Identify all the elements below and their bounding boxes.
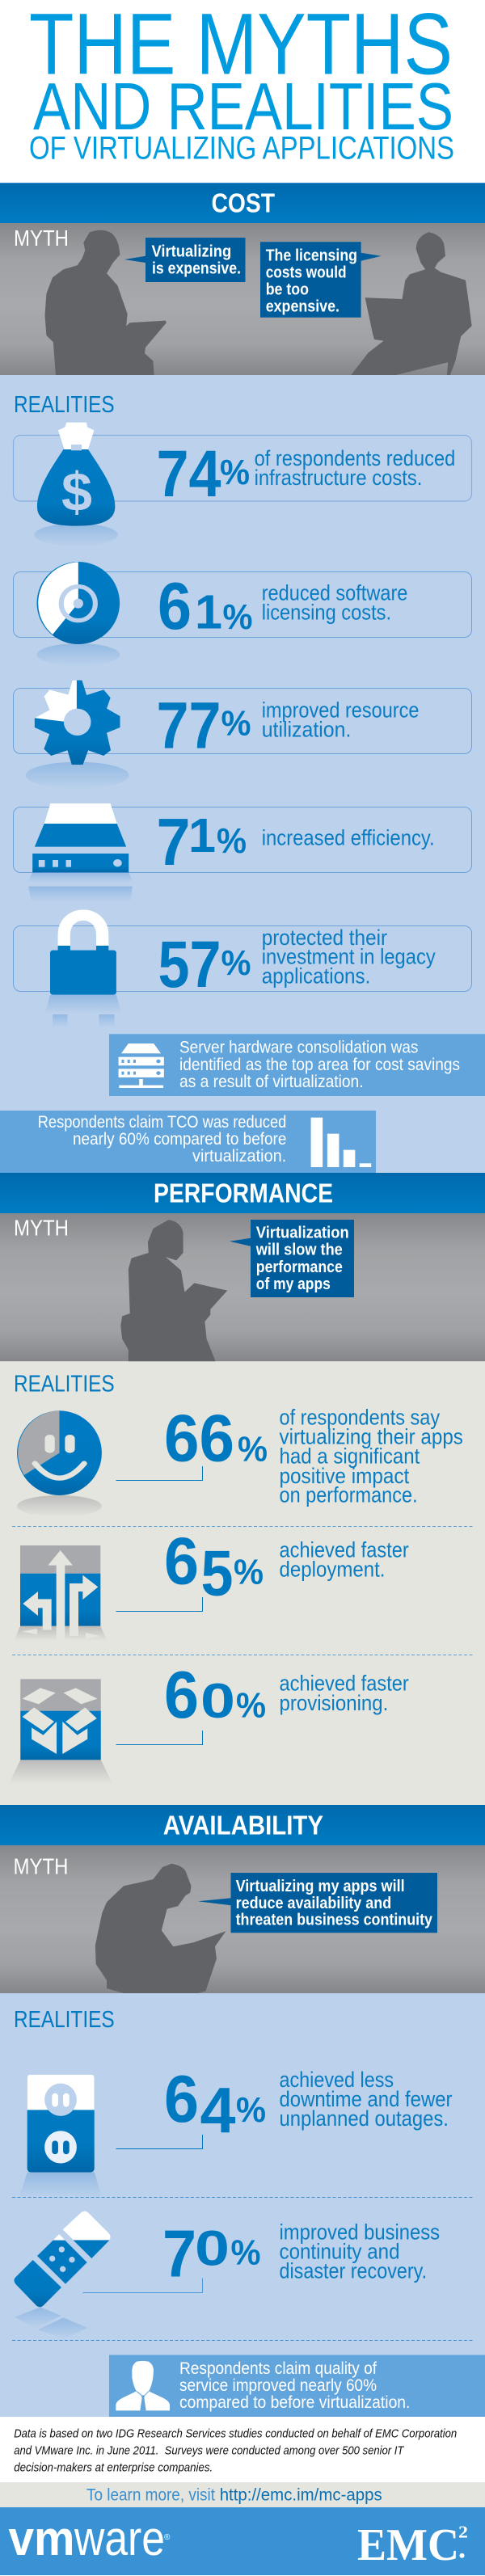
description: provisioning. — [280, 1691, 388, 1715]
heading band: performance: PERFORMANCE — [154, 1178, 333, 1208]
icon: money bag — [34, 423, 118, 546]
heading band: cost — [0, 183, 485, 223]
callout text — [179, 2359, 410, 2412]
value: 0 — [200, 1674, 235, 1728]
speech bubble: virtualizing is expensive: is expensive. — [152, 259, 241, 277]
description: protected their — [262, 925, 387, 950]
value: 5 — [200, 1537, 233, 1608]
callout text: compared to before virtualization. — [179, 2393, 410, 2412]
speech bubble: slow performance: will slow the — [255, 1241, 343, 1259]
speech bubble: licensing costs: be too — [266, 280, 309, 299]
speech bubble: slow performance: Virtualization — [256, 1224, 349, 1242]
value — [158, 568, 252, 643]
speech bubble: licensing costs — [260, 242, 382, 318]
callout: TCO reduced — [0, 1111, 376, 1173]
value: % — [217, 821, 247, 861]
speech bubble: slow performance — [230, 1220, 354, 1297]
source note — [14, 2427, 457, 2475]
description — [262, 925, 436, 989]
connector — [116, 2135, 202, 2148]
callout text: as a result of virtualization. — [179, 1073, 364, 1091]
icon: gear — [26, 681, 129, 789]
speech bubble: reduce availability: Virtualizing my apps will — [236, 1877, 405, 1895]
description: on performance. — [280, 1483, 418, 1507]
speech bubble: reduce availability: threaten business continuity — [236, 1911, 433, 1929]
heading band: cost: COST — [212, 188, 275, 218]
description: continuity and — [280, 2239, 399, 2263]
description: achieved faster — [280, 1672, 409, 1696]
value — [164, 1523, 264, 1608]
icon: server — [27, 803, 133, 901]
speech bubble: virtualizing is expensive: Virtualizing — [152, 242, 231, 260]
speech bubble: licensing costs: costs would — [266, 264, 347, 282]
description: licensing costs. — [262, 601, 391, 625]
description — [262, 581, 407, 625]
stat row: 77% — [13, 681, 472, 789]
source note: and VMware Inc. in June 2011. Surveys were conducted among over 500 senior IT — [14, 2444, 405, 2458]
connector — [82, 2278, 202, 2292]
value: 7 — [157, 804, 191, 879]
footer logos band — [0, 2507, 485, 2575]
speech bubble: reduce availability: reduce availability and — [236, 1894, 391, 1912]
stat row: 64% — [19, 2061, 453, 2198]
value — [164, 1657, 266, 1732]
value: % — [236, 1685, 266, 1725]
description: had a significant — [280, 1444, 420, 1469]
panel: availability myth — [0, 1845, 485, 1993]
value: % — [234, 1552, 264, 1592]
vmware logo: ware — [74, 2511, 165, 2565]
description: applications. — [262, 964, 370, 989]
learn more strip — [0, 2482, 485, 2507]
description: achieved faster — [280, 1538, 409, 1562]
description: of respondents say — [280, 1405, 441, 1429]
description — [280, 1538, 409, 1582]
callout text: identified as the top area for cost savings — [179, 1056, 460, 1074]
speech bubble: virtualizing is expensive — [124, 238, 246, 282]
description: utilization. — [262, 717, 351, 741]
value: 4 — [200, 2074, 236, 2146]
speech bubble: licensing costs: The licensing — [266, 247, 357, 265]
speech bubble: slow performance: performance — [256, 1258, 343, 1276]
myth label: MYTH — [14, 226, 69, 251]
value: 6 — [164, 2061, 199, 2136]
learn more strip: To learn more, visit — [86, 2485, 215, 2504]
panel: cost myth — [0, 223, 485, 375]
value: 6 — [164, 1657, 199, 1732]
EMC2 logo: EMC — [357, 2520, 459, 2570]
learn more strip: http://emc.im/mc-apps — [220, 2485, 382, 2504]
silhouette: hunched man with laptop — [95, 1864, 226, 1993]
value: 7 — [162, 2216, 196, 2291]
callout text: nearly 60% compared to before — [73, 1130, 286, 1149]
stat row: 65% — [14, 1523, 409, 1641]
description — [262, 698, 419, 741]
icon: bandage — [14, 2211, 111, 2338]
value — [162, 2216, 260, 2291]
heading band: availability — [0, 1805, 485, 1845]
speech bubble: licensing costs: expensive. — [266, 297, 340, 316]
speech bubble: slow performance: of my apps — [256, 1275, 331, 1293]
callout: server consolidation — [109, 1034, 485, 1096]
value: % — [236, 2090, 266, 2130]
icon: server stack — [119, 1043, 164, 1088]
icon: disc chart — [37, 562, 120, 666]
myth label: MYTH — [13, 1853, 68, 1878]
callout text: service improved nearly 60% — [179, 2376, 377, 2395]
silhouette: woman with laptop — [351, 232, 472, 375]
description: downtime and fewer — [280, 2087, 453, 2111]
callout text — [179, 1039, 460, 1091]
stat row: 71% — [13, 803, 472, 901]
stat row: 74% — [13, 423, 472, 546]
value: 1 — [195, 585, 222, 639]
stat row: 61% — [13, 562, 472, 666]
vmware logo — [8, 2511, 171, 2565]
value — [164, 2061, 266, 2146]
description — [280, 2220, 440, 2283]
description: infrastructure costs. — [255, 466, 422, 490]
value: 6 — [158, 568, 192, 643]
myth label: MYTH — [14, 1215, 69, 1240]
panel: performance realities — [0, 1361, 485, 1805]
silhouette: woman with tablet — [120, 1220, 227, 1361]
realities heading: REALITIES — [14, 392, 115, 418]
panel: performance myth — [0, 1213, 485, 1361]
description: unplanned outages. — [280, 2106, 449, 2131]
description: of respondents reduced — [255, 446, 455, 470]
panel: availability realities — [0, 1993, 485, 2417]
description: investment in legacy — [262, 945, 436, 969]
icon: declining bar chart — [311, 1118, 371, 1167]
value: % — [238, 1429, 268, 1469]
description: improved resource — [262, 698, 419, 722]
value: % — [220, 453, 250, 492]
stat row: 70% — [14, 2211, 440, 2338]
source note: decision-makers at enterprise companies. — [14, 2461, 213, 2475]
callout text: Respondents claim TCO was reduced — [38, 1113, 286, 1132]
callout text: Respondents claim quality of — [179, 2359, 377, 2378]
icon: money bag: $ — [61, 462, 92, 523]
realities heading: REALITIES — [14, 1372, 115, 1398]
value: % — [221, 943, 251, 983]
value: 0 — [195, 2220, 230, 2275]
value: % — [223, 597, 252, 637]
description: virtualizing their apps — [280, 1425, 463, 1449]
icon: open box — [9, 1679, 113, 1784]
description: disaster recovery. — [280, 2258, 427, 2283]
panel: cost realities — [0, 375, 485, 1173]
title — [29, 0, 454, 167]
value: 6 — [164, 1523, 199, 1598]
value: 1 — [188, 809, 216, 862]
value: 66 — [164, 1400, 234, 1475]
EMC2 logo: 2 — [458, 2522, 468, 2541]
silhouette: man with laptop — [44, 230, 167, 375]
icon: padlock — [45, 915, 121, 1027]
connector — [116, 1731, 202, 1744]
icon: businessman bust — [116, 2361, 170, 2410]
value: 74 — [157, 437, 221, 511]
callout text: Server hardware consolidation was — [179, 1039, 418, 1057]
heading band: availability: AVAILABILITY — [163, 1810, 323, 1840]
value: 57 — [158, 928, 221, 1001]
vmware logo: vm — [8, 2511, 74, 2565]
callout: quality of service — [109, 2355, 485, 2417]
description — [280, 1672, 409, 1715]
value: % — [231, 2232, 260, 2272]
vmware logo: ® — [164, 2533, 171, 2542]
stat row: 57% — [13, 915, 472, 1027]
value — [157, 804, 247, 879]
description: positive impact — [280, 1464, 410, 1488]
value: % — [221, 703, 251, 743]
callout text: virtualization. — [192, 1147, 286, 1166]
realities heading: REALITIES — [14, 2007, 115, 2033]
icon: power outlet — [19, 2075, 102, 2198]
description — [280, 1405, 463, 1507]
connector — [116, 1597, 202, 1612]
description — [280, 2068, 453, 2131]
description: improved business — [280, 2220, 440, 2244]
value: 77 — [157, 689, 221, 762]
description: reduced software — [262, 581, 407, 605]
speech bubble: reduce availability — [198, 1873, 437, 1933]
icon: smiley — [17, 1410, 102, 1517]
heading band: performance — [0, 1173, 485, 1213]
stat row: 66% — [17, 1400, 463, 1517]
stat row: 60% — [9, 1657, 409, 1784]
description: increased efficiency. — [262, 826, 435, 850]
connector — [116, 1466, 202, 1481]
description: achieved less — [280, 2068, 394, 2092]
icon: road arrows — [14, 1545, 108, 1641]
description: deployment. — [280, 1558, 385, 1582]
callout text — [38, 1113, 286, 1166]
description — [255, 446, 455, 490]
